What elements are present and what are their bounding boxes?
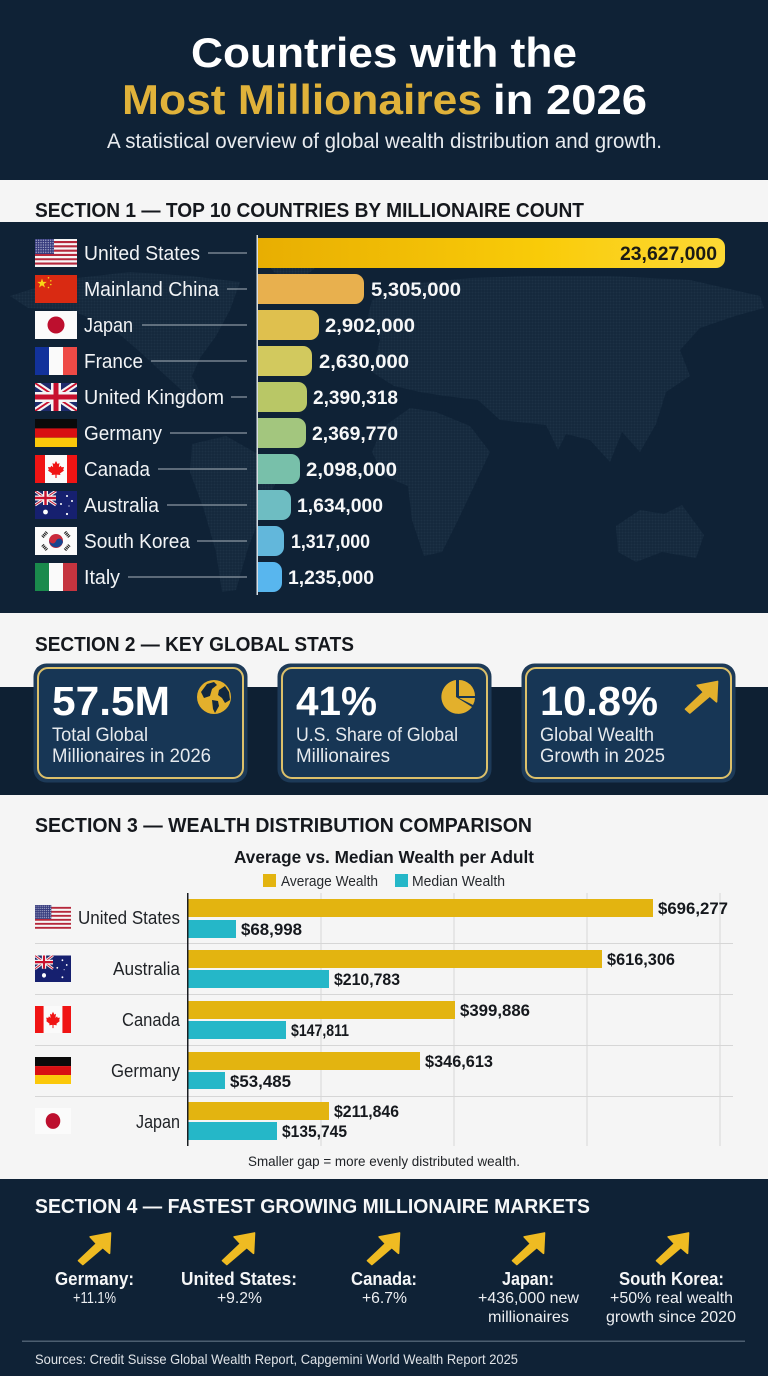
market: Japan <box>478 1233 579 1326</box>
row: Italy: 1,235,000 <box>288 567 374 589</box>
section 3 background <box>0 795 768 1179</box>
stat card: wealth growth: 10.8% <box>540 678 658 724</box>
row: Japan <box>35 1102 399 1141</box>
market: Germany: Germany: <box>55 1269 134 1289</box>
market: Japan: millionaires <box>488 1309 569 1326</box>
stat card: US share: Millionaires <box>296 746 390 767</box>
row: Canada <box>35 1001 530 1040</box>
row: Australia: $616,306 <box>607 950 675 969</box>
section 2 background <box>0 613 768 795</box>
section 4 background <box>0 1179 768 1376</box>
icon: pie chart <box>441 680 475 714</box>
row: France: 2,630,000 <box>319 351 409 373</box>
row: Canada: 2,098,000 <box>306 459 397 481</box>
row: Canada: $147,811 <box>291 1021 349 1040</box>
row: United States: United States <box>78 908 180 928</box>
title <box>122 29 647 123</box>
sources: Sources: Credit Suisse Global Wealth Report, Capgemini World Wealth Report 2025 <box>35 1351 518 1367</box>
row: Germany: $346,613 <box>425 1052 493 1071</box>
row: Australia <box>35 490 383 520</box>
row: Germany <box>35 1052 493 1091</box>
heading: section 2: SECTION 2 — KEY GLOBAL STATS <box>35 634 354 656</box>
stat card: wealth growth <box>522 664 736 782</box>
row: United Kingdom <box>35 382 398 412</box>
row: Germany <box>35 418 398 448</box>
market: Germany: +11.1% <box>73 1290 116 1307</box>
chart axis <box>256 235 258 595</box>
row: South Korea <box>35 526 370 556</box>
stat card: US share: U.S. Share of Global <box>296 725 458 746</box>
row: Japan <box>35 310 415 340</box>
stat card: total millionaires: Millionaires in 2026 <box>52 746 211 767</box>
row: United States: United States <box>84 243 200 265</box>
row: United States: 23,627,000 <box>620 243 717 265</box>
row: Australia: Australia <box>84 495 160 517</box>
heading: section 1: SECTION 1 — TOP 10 COUNTRIES BY MILLIONAIRE COUNT <box>35 200 584 222</box>
row: France <box>35 346 409 376</box>
world map background <box>10 244 764 592</box>
stat card: total millionaires: 57.5M <box>52 678 170 724</box>
chart title: Average vs. Median Wealth per Adult <box>234 847 534 867</box>
bar chart: average vs median wealth <box>35 847 733 1146</box>
market: Japan: +436,000 new <box>478 1290 579 1307</box>
row: Germany: Germany <box>111 1061 180 1081</box>
row: United Kingdom: 2,390,318 <box>313 387 398 409</box>
market: Canada: +6.7% <box>362 1290 407 1307</box>
title: in 2026 <box>493 76 647 123</box>
row: South Korea: South Korea <box>84 531 191 553</box>
market: South Korea: growth since 2020 <box>606 1309 736 1326</box>
row: United States <box>35 238 725 268</box>
row: Australia: $210,783 <box>334 970 400 989</box>
icon: globe <box>197 680 231 714</box>
legend: Average Wealth <box>281 874 378 890</box>
stat card: total millionaires <box>34 664 248 782</box>
row: Mainland China: 5,305,000 <box>371 279 461 301</box>
market: Japan: Japan: <box>502 1269 554 1289</box>
row: Italy: Italy <box>84 567 120 589</box>
legend: Median Wealth <box>412 874 505 890</box>
row: Canada: Canada <box>122 1010 181 1030</box>
section 1 heading band <box>0 180 768 222</box>
stat card: wealth growth: Growth in 2025 <box>540 746 665 767</box>
market: United States: United States: <box>181 1269 297 1289</box>
row: Japan: $211,846 <box>334 1102 399 1121</box>
row: Italy <box>35 562 374 592</box>
row: Germany: Germany <box>84 423 162 445</box>
stat card: US share: 41% <box>296 678 377 724</box>
market: United States: +9.2% <box>217 1290 262 1307</box>
subtitle: A statistical overview of global wealth distribution and growth. <box>107 130 662 153</box>
axis line <box>187 893 188 1146</box>
title: Countries with the <box>191 29 577 76</box>
panel: top 10 countries <box>0 222 768 613</box>
market: South Korea <box>606 1233 736 1326</box>
market: Germany <box>55 1233 134 1307</box>
row: Mainland China <box>35 274 461 304</box>
row: Canada <box>35 454 397 484</box>
row: Australia: Australia <box>113 959 181 979</box>
market: South Korea: South Korea: <box>619 1269 724 1289</box>
row: United Kingdom: United Kingdom <box>84 387 224 409</box>
row: Germany: $53,485 <box>230 1072 291 1091</box>
heading: section 3: SECTION 3 — WEALTH DISTRIBUTION COMPARISON <box>35 815 532 837</box>
row: France: France <box>84 351 143 373</box>
header background <box>0 0 768 180</box>
stat card: total millionaires: Total Global <box>52 725 148 746</box>
market: South Korea: +50% real wealth <box>610 1290 733 1307</box>
row: Australia: 1,634,000 <box>297 495 383 517</box>
market: Canada: Canada: <box>351 1269 417 1289</box>
row: Canada: Canada <box>84 459 151 481</box>
row: Germany: 2,369,770 <box>312 423 398 445</box>
row: South Korea: 1,317,000 <box>291 531 370 553</box>
row: Japan: Japan <box>84 315 133 337</box>
icon: up arrow <box>685 681 718 713</box>
heading: section 4: SECTION 4 — FASTEST GROWING MILLIONAIRE MARKETS <box>35 1196 590 1218</box>
row: United States: $696,277 <box>658 899 728 918</box>
title: Most Millionaires <box>122 76 482 123</box>
market: Canada <box>351 1233 417 1307</box>
row: Mainland China: Mainland China <box>84 279 220 301</box>
row: Japan: $135,745 <box>282 1122 347 1141</box>
row: Australia <box>35 950 675 989</box>
row: United States <box>35 899 728 939</box>
footnote: Smaller gap = more evenly distributed wealth. <box>248 1154 520 1169</box>
row: Canada: $399,886 <box>460 1001 530 1020</box>
market: United States <box>181 1233 297 1307</box>
row: Japan: 2,902,000 <box>325 315 415 337</box>
row: United States: $68,998 <box>241 920 302 939</box>
stat card: wealth growth: Global Wealth <box>540 725 654 746</box>
stat card: US share <box>278 664 492 782</box>
row: Japan: Japan <box>136 1112 180 1132</box>
legend <box>263 874 505 890</box>
